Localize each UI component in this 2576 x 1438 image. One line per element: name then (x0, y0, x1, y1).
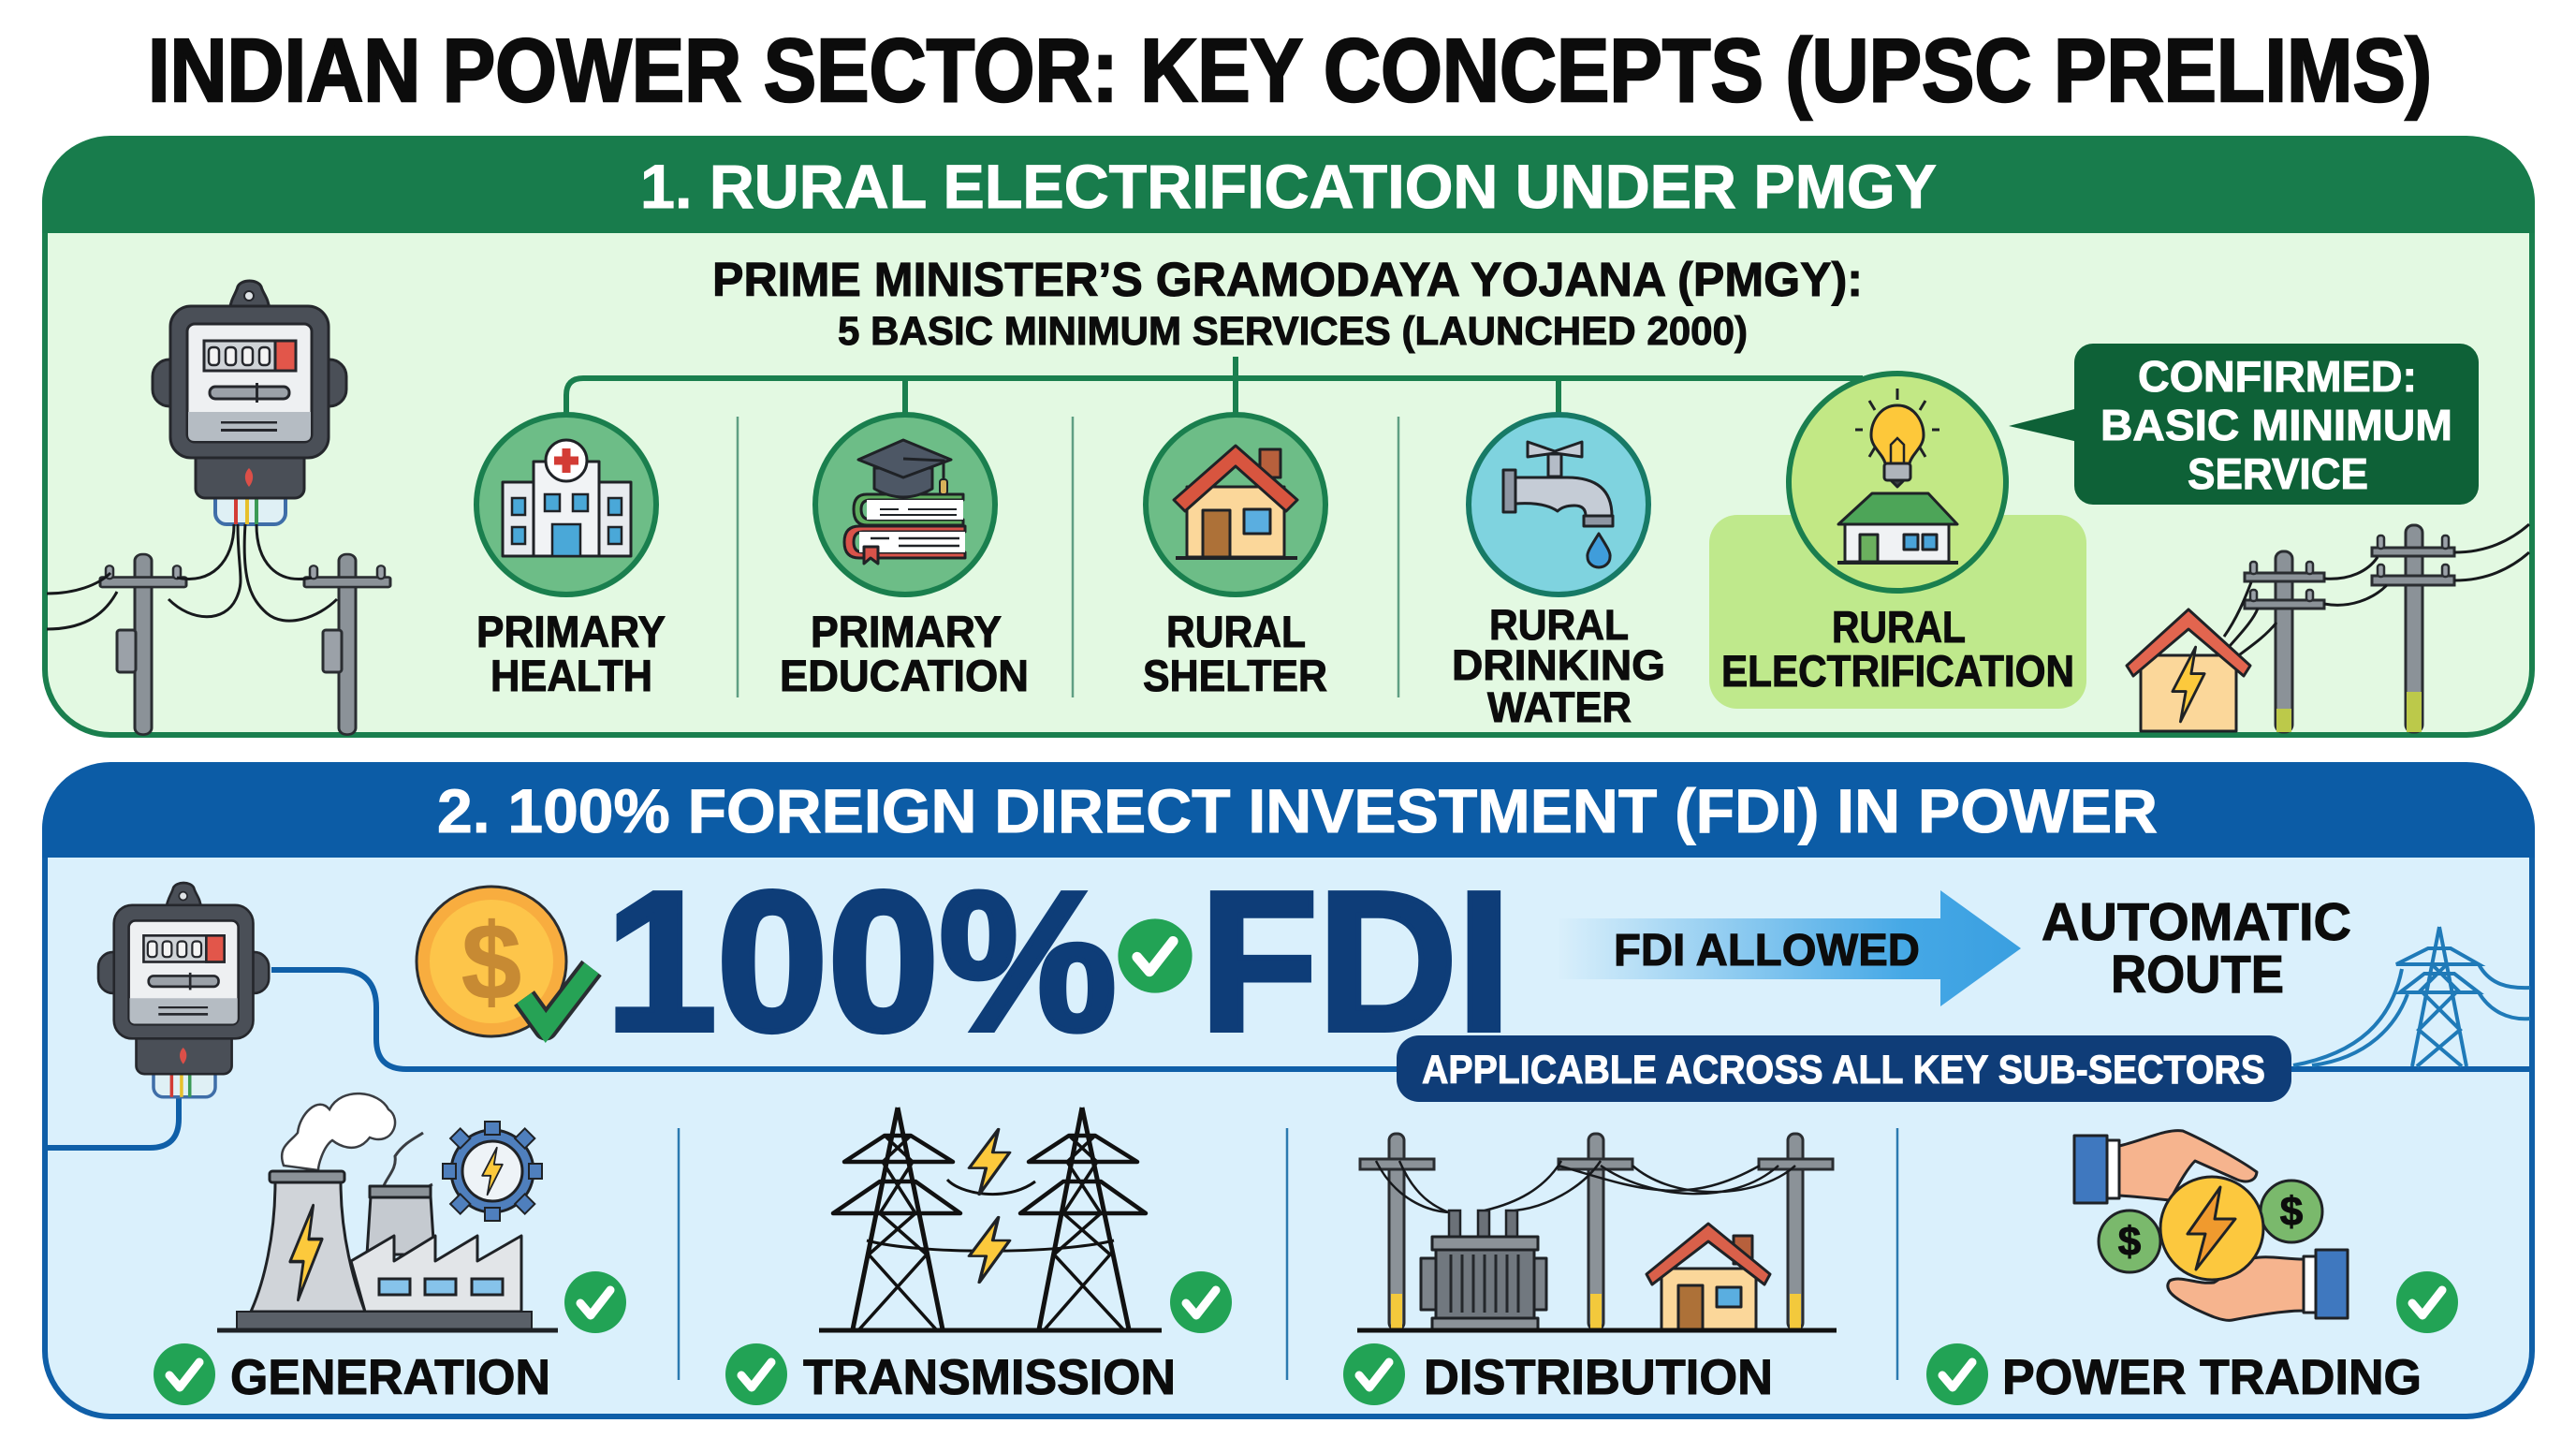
check badge (1343, 1343, 1405, 1405)
icon: right poles with house (2127, 524, 2529, 732)
label: primary health: PRIMARY (476, 607, 666, 656)
check badge (154, 1343, 215, 1405)
service: rural electrification highlighted (1709, 374, 2086, 709)
label: rural electrification: RURAL (1832, 602, 1966, 652)
icon: hands exchanging power and money: $ (2118, 1219, 2141, 1265)
icon: hands exchanging power and money (2074, 1131, 2348, 1320)
check badge (564, 1271, 626, 1333)
label: primary education: EDUCATION (780, 651, 1029, 700)
service: primary education (780, 415, 1029, 700)
icon: water tap (1503, 442, 1613, 567)
label: rural drinking water: DRINKING (1452, 641, 1665, 689)
section header bar: rural electrification (42, 137, 2535, 233)
label: automatic route (2042, 892, 2351, 1005)
icon: coin with check (417, 887, 592, 1036)
big text: FDI: FDI (1200, 850, 1511, 1072)
label: primary education: PRIMARY (811, 607, 1002, 656)
label: primary health (476, 607, 666, 700)
icon: light bulb (1855, 389, 1939, 487)
icon: electrified house (1837, 493, 1958, 563)
icon: coin with check: $ (461, 902, 521, 1022)
section heading 1: 1. RURAL ELECTRIFICATION UNDER PMGY (640, 152, 1937, 221)
label: automatic route: ROUTE (2111, 945, 2284, 1005)
icon: hands exchanging power and money: $ (2280, 1189, 2303, 1235)
callout: confirmed basic minimum service: SERVICE (2188, 449, 2368, 498)
label: rural electrification: ELECTRIFICATION (1721, 646, 2074, 696)
icon: poles transformer and house (1357, 1134, 1837, 1330)
arrow: FDI allowed (1559, 890, 2021, 1006)
callout: confirmed basic minimum service: CONFIRMED: (2138, 352, 2417, 401)
callout: confirmed basic minimum service (2009, 344, 2479, 505)
scheme title: PRIME MINISTER’S GRAMODAYA YOJANA (PMGY): (712, 253, 1863, 306)
blue conduit lines (47, 970, 2532, 1148)
icon: electricity meter small (98, 883, 269, 1097)
label: primary health: HEALTH (490, 651, 652, 700)
label: primary education (780, 607, 1029, 700)
icon: hospital (503, 440, 631, 556)
icon: transmission towers (819, 1108, 1162, 1330)
label: distribution: DISTRIBUTION (1424, 1350, 1773, 1405)
label: transmission: TRANSMISSION (803, 1350, 1176, 1405)
icon: house (1174, 446, 1297, 558)
panel: 100% FDI in power (42, 763, 2535, 1416)
label: rural drinking water (1452, 601, 1665, 731)
sub-sector: distribution (1343, 1134, 1837, 1405)
icon: graduation cap and books (844, 440, 965, 564)
service: primary health (476, 415, 666, 700)
label: rural drinking water: WATER (1487, 683, 1632, 731)
check badge (2396, 1271, 2458, 1333)
sub-sector dividers (679, 1128, 1897, 1380)
panel: rural electrification under PMGY (42, 137, 2535, 735)
check badge (1170, 1271, 1232, 1333)
label: automatic route: AUTOMATIC (2042, 892, 2351, 952)
scheme subtitle: 5 BASIC MINIMUM SERVICES (LAUNCHED 2000) (838, 309, 1748, 354)
section header bar: FDI (42, 763, 2535, 858)
banner: applicable across all key sub-sectors (1397, 1035, 2291, 1102)
service: rural shelter (1143, 415, 1327, 700)
connector tree (566, 357, 1863, 414)
icon: left utility poles and wires (47, 524, 390, 734)
highlight box (1709, 515, 2086, 709)
banner: applicable across all key sub-sectors: APPLICABLE ACROSS ALL KEY SUB-SECTORS (1422, 1048, 2265, 1093)
service: rural drinking water (1452, 415, 1665, 731)
label: rural shelter: SHELTER (1143, 651, 1327, 700)
icon: small transmission tower (2293, 927, 2530, 1066)
label: rural drinking water: RURAL (1489, 601, 1629, 649)
label: power trading: POWER TRADING (2002, 1350, 2422, 1405)
label: rural shelter: RURAL (1166, 607, 1306, 656)
label: rural electrification (1721, 602, 2074, 696)
icon: check (1118, 918, 1193, 993)
sub-sector: generation (154, 1093, 626, 1405)
check badge (725, 1343, 787, 1405)
big text: 100%: 100% (606, 850, 1117, 1072)
callout: confirmed basic minimum service: BASIC MINIMUM (2100, 401, 2452, 449)
label: rural shelter (1143, 607, 1327, 700)
section heading 2: 2. 100% FOREIGN DIRECT INVESTMENT (FDI) IN POWER (437, 776, 2158, 845)
icon: electricity meter (153, 281, 346, 524)
check badge (1926, 1343, 1988, 1405)
sub-sector: transmission (725, 1108, 1232, 1405)
arrow: FDI allowed: FDI ALLOWED (1614, 926, 1920, 976)
sub-sector: power trading (1926, 1131, 2458, 1405)
icon: power plant (217, 1093, 558, 1330)
label: generation: GENERATION (230, 1350, 550, 1405)
